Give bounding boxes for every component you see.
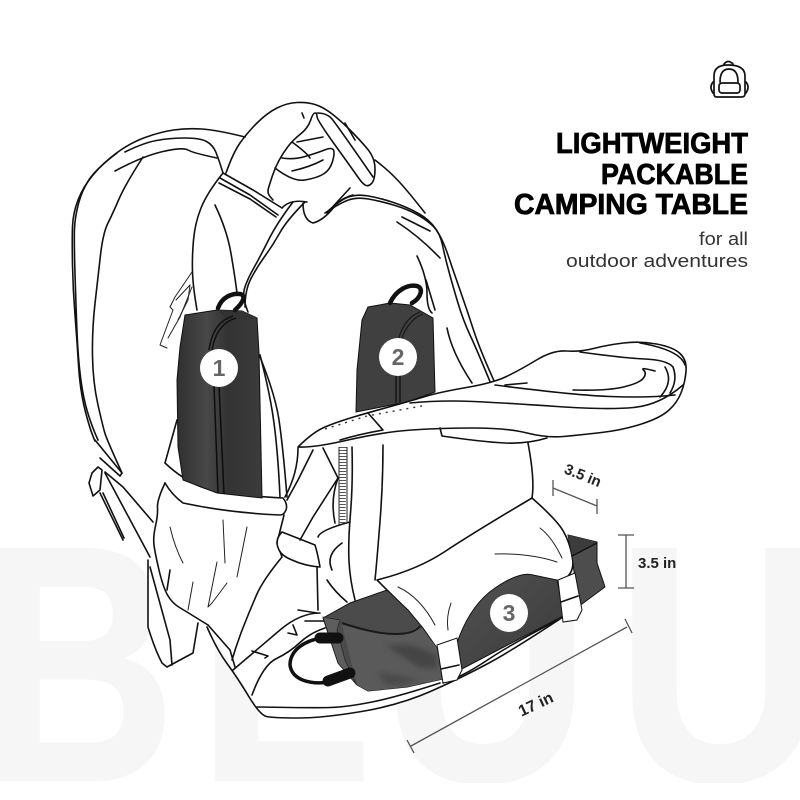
title: LIGHTWEIGHT (556, 128, 748, 160)
back padding and shoulder strap (72, 129, 245, 557)
number 3 badge: 3 (503, 600, 515, 626)
number 2 badge: 2 (392, 344, 404, 370)
subtitle (566, 229, 748, 271)
subtitle: for all (699, 229, 748, 249)
icon: backpack (711, 62, 748, 97)
dimension: height 3.5 in (618, 535, 676, 588)
side buckle (160, 272, 192, 348)
title: CAMPING TABLE (514, 189, 748, 221)
pocket creases (170, 520, 247, 610)
zipper (339, 447, 347, 525)
lower body creases (398, 528, 562, 630)
lower body panels (285, 443, 573, 610)
dimension: depth 3.5 in: 3.5 in (562, 461, 604, 491)
side pocket (148, 352, 287, 667)
backpack white silhouette (148, 443, 605, 718)
stitched lid (298, 342, 686, 447)
bag 2 (356, 286, 435, 412)
bag 1 (177, 294, 262, 498)
front flap (277, 532, 320, 567)
bag 3 (290, 535, 605, 691)
base and bottom edge (207, 610, 563, 718)
dimension: length 17 in: 17 in (516, 690, 556, 720)
dimension: length 17 in (407, 619, 632, 753)
backpack line illustration (72, 102, 686, 718)
title (514, 128, 748, 221)
top handle and upper body (192, 102, 495, 384)
number 1 badge: 1 (213, 355, 226, 381)
bag 3 handle (290, 638, 350, 683)
dimension: depth 3.5 in (553, 461, 604, 514)
title: PACKABLE (601, 159, 748, 191)
dimension: height 3.5 in: 3.5 in (638, 555, 676, 572)
number 1 badge (200, 349, 238, 387)
number 3 badge (490, 594, 528, 632)
subtitle: outdoor adventures (566, 251, 748, 271)
